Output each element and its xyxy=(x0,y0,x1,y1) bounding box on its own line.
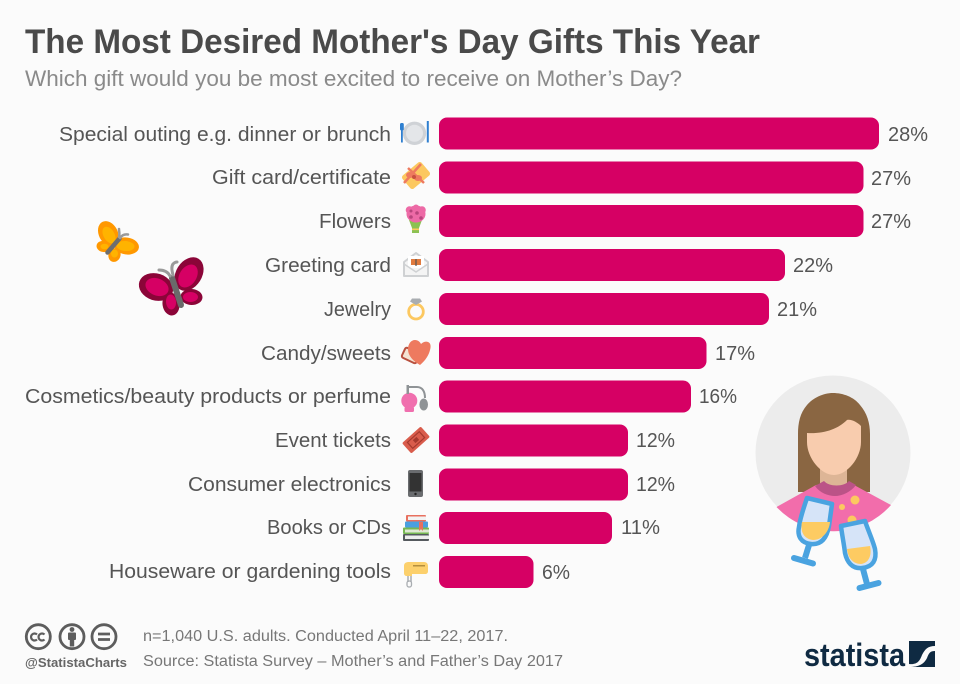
subtitle: Which gift would you be most excited to receive on Mother’s Day? xyxy=(25,66,682,91)
icon: ring xyxy=(409,298,423,319)
title: The Most Desired Mother's Day Gifts This Year xyxy=(25,23,760,61)
icon: greeting card envelope xyxy=(404,253,428,276)
icon: flowers xyxy=(406,204,426,233)
value labels: 27% xyxy=(871,167,911,190)
sample note: n=1,040 U.S. adults. Conducted April 11–22, 2017. xyxy=(143,628,508,645)
category labels: Houseware or gardening tools xyxy=(109,560,391,583)
icon: candy box with heart xyxy=(401,340,431,365)
category labels: Gift card/certificate xyxy=(212,166,391,189)
icon: gift card xyxy=(401,161,431,190)
icon: creative commons licence xyxy=(26,625,116,649)
source: Source: Statista Survey – Mother’s and Father’s Day 2017 xyxy=(143,653,563,670)
twitter handle: @StatistaCharts xyxy=(25,656,127,670)
category labels: Candy/sweets xyxy=(261,342,391,365)
illustration: woman with champagne glasses xyxy=(756,376,910,588)
value labels: 6% xyxy=(542,561,570,584)
category labels: Cosmetics/beauty products or perfume xyxy=(25,385,391,408)
right glass xyxy=(841,521,878,588)
left glass xyxy=(794,498,832,564)
category labels: Special outing e.g. dinner or brunch xyxy=(59,123,391,146)
icon: crimson butterfly xyxy=(135,252,210,317)
category labels: Flowers xyxy=(319,210,391,233)
icon: hand mixer xyxy=(404,562,428,587)
value labels: 12% xyxy=(636,429,675,452)
value labels: 12% xyxy=(636,473,675,496)
category labels: Event tickets xyxy=(275,429,391,452)
category labels: Jewelry xyxy=(324,298,392,321)
value labels: 21% xyxy=(777,298,817,321)
icon: smartphone xyxy=(408,470,423,497)
value labels: 28% xyxy=(888,123,928,146)
icon: books xyxy=(403,515,429,541)
category labels: Consumer electronics xyxy=(188,473,391,496)
category labels xyxy=(25,123,392,583)
value labels xyxy=(542,123,928,584)
value labels: 22% xyxy=(793,254,833,277)
category labels: Greeting card xyxy=(265,254,391,277)
icon: ticket xyxy=(402,426,430,454)
statista logo: statista xyxy=(804,637,905,673)
icon: orange butterfly xyxy=(94,218,140,264)
value labels: 16% xyxy=(699,385,737,408)
category labels: Books or CDs xyxy=(267,516,391,539)
value labels: 11% xyxy=(621,516,660,539)
value labels: 27% xyxy=(871,210,911,233)
value labels: 17% xyxy=(715,342,755,365)
icon: perfume bottle xyxy=(401,385,428,412)
bar chart xyxy=(439,118,879,588)
icon: plate and cutlery xyxy=(400,121,429,145)
